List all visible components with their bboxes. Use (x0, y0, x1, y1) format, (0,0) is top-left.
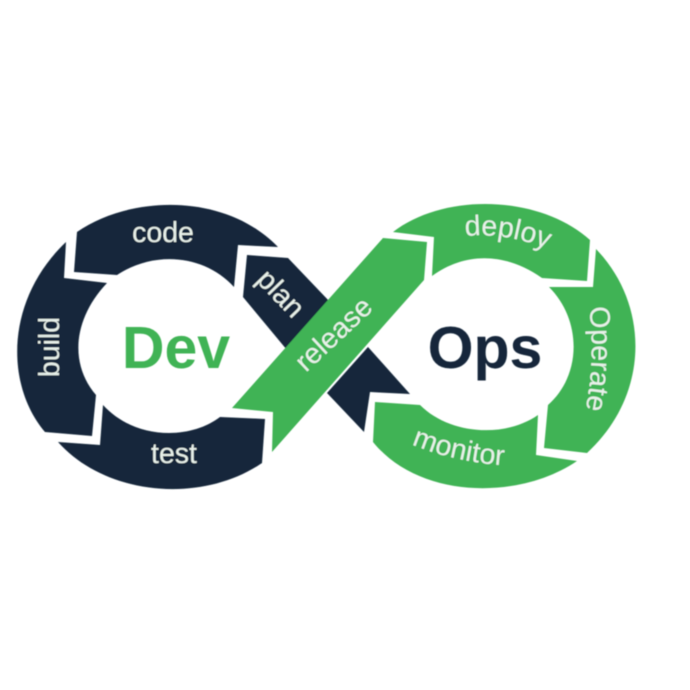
label: monitor: monitor (412, 430, 506, 466)
label: build: build (34, 317, 66, 377)
label: code: code (132, 217, 194, 249)
segment: Operate (543, 248, 636, 454)
segment: plan (243, 255, 330, 350)
segment: code (74, 205, 278, 287)
label: Operate: Operate (584, 306, 611, 411)
segment: monitor (372, 401, 578, 490)
segment: release (232, 238, 427, 452)
label: plan: plan (250, 263, 311, 324)
label: deploy: deploy (465, 214, 553, 252)
segment: deploy (392, 203, 591, 282)
label: test: test (151, 438, 197, 470)
segment: build (17, 242, 107, 436)
segment: plan lower tail (327, 347, 410, 432)
label: release: release (289, 291, 379, 378)
segment: test (58, 405, 265, 489)
heading: Ops: Ops (428, 315, 542, 381)
heading: Dev: Dev (122, 315, 230, 381)
